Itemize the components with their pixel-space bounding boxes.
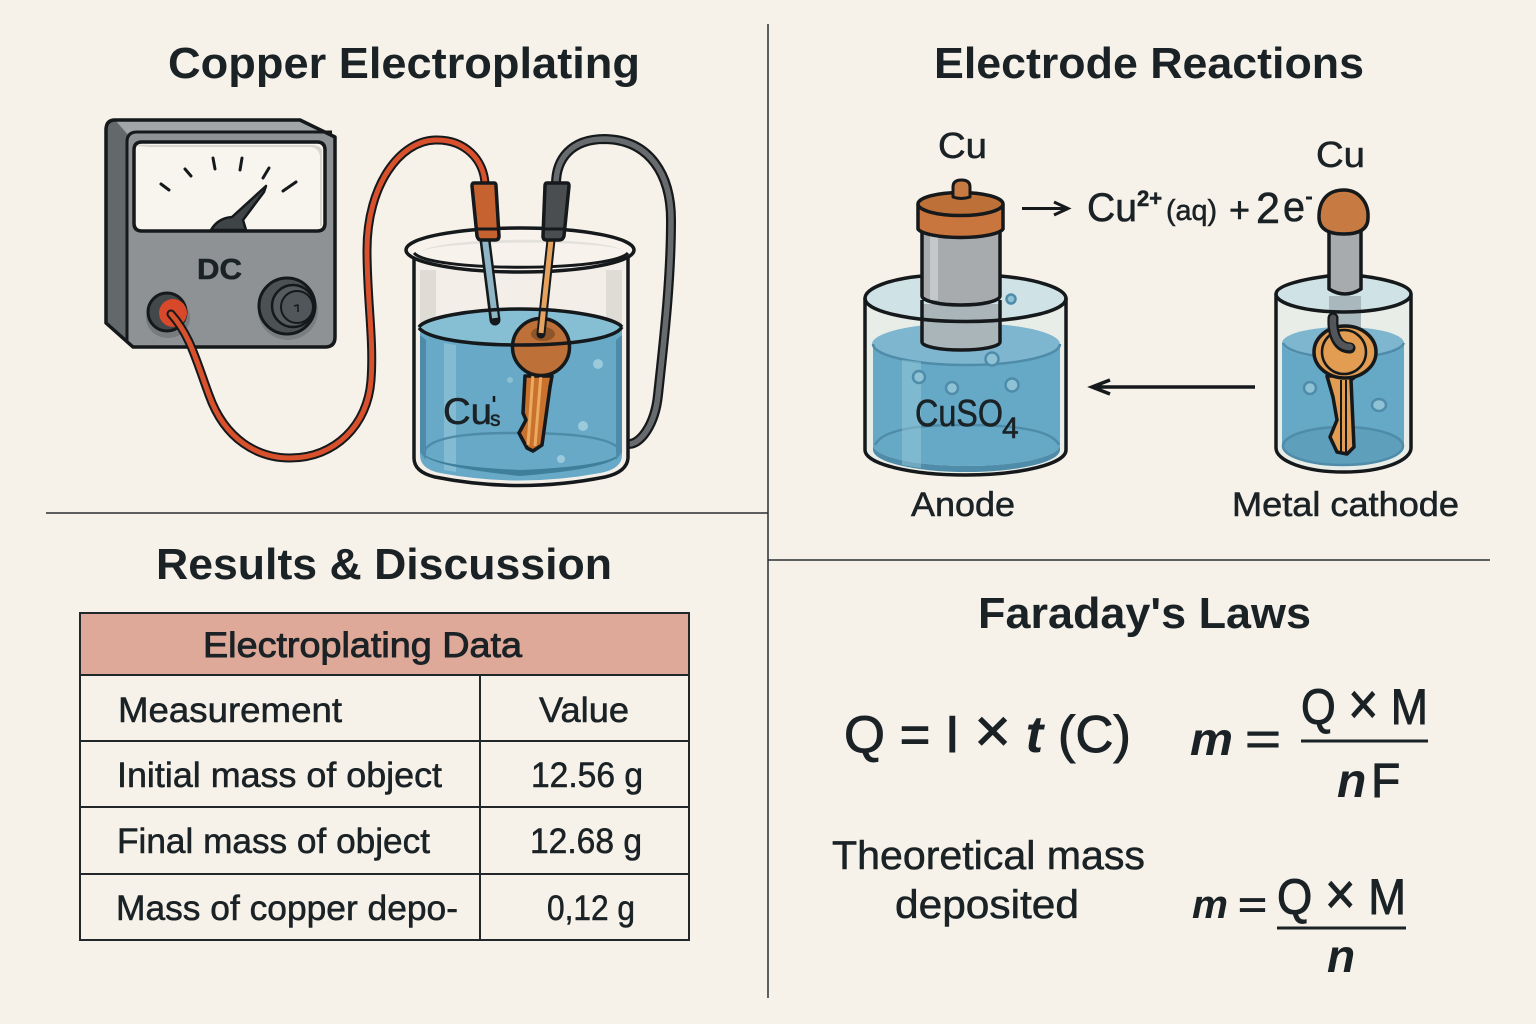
row: measurement: Measurement	[118, 691, 342, 730]
equation: anode oxidation: 2+	[1137, 186, 1162, 211]
label: Cu subscript s: Cu	[443, 391, 492, 432]
row: measurement: Value	[539, 691, 629, 730]
icon: cathode cell with key	[1276, 190, 1411, 472]
title: faraday's laws: Faraday's Laws	[978, 589, 1311, 638]
electrode: grey cylinder with copper cap	[918, 180, 1003, 350]
equation: anode oxidation: e	[1283, 183, 1305, 230]
panel: copper electroplating	[106, 39, 671, 486]
table header	[80, 613, 689, 675]
formula: mass: =	[1245, 713, 1281, 765]
probe: black clip	[541, 183, 569, 334]
label: theoretical mass deposited	[832, 834, 1145, 927]
formula: mass	[1190, 672, 1428, 808]
row: final mass	[117, 822, 642, 861]
row: measurement	[118, 691, 629, 730]
formula: mass: Q × M	[1301, 672, 1428, 737]
icon: beaker with copper sulfate solution	[406, 183, 634, 486]
equation: anode oxidation	[1087, 183, 1312, 233]
arrow: to left	[1092, 380, 1255, 394]
title: electrode reactions: Electrode Reactions	[934, 39, 1364, 88]
electrode: grey rod with copper ball	[1319, 190, 1368, 332]
formula: theoretical mass: Q × M	[1277, 862, 1406, 927]
icon: beaker with copper sulfate solution: s	[490, 408, 500, 431]
icon: DC power meter	[106, 120, 335, 347]
beaker rim	[406, 228, 634, 272]
title: results and discussion: Results & Discussion	[156, 540, 612, 589]
label: CuSO4: CuSO	[915, 393, 1003, 435]
equation: anode oxidation: +	[1229, 189, 1250, 230]
table: electroplating data: Electroplating Data	[203, 626, 523, 665]
formula: mass: F	[1371, 755, 1400, 808]
icon: anode cell: 4	[1002, 412, 1019, 445]
row: mass of copper deposited: Mass of copper depo-	[116, 889, 458, 928]
formula: theoretical mass	[1192, 862, 1406, 982]
formula: mass: m	[1190, 713, 1233, 765]
label: cathode Cu: Cu	[1316, 134, 1365, 175]
arrow: to right	[1022, 202, 1068, 215]
icon: copper key	[512, 318, 570, 451]
formula: theoretical mass: n	[1327, 930, 1355, 982]
equation: anode oxidation: (aq)	[1166, 195, 1217, 227]
equation: anode oxidation: 2	[1256, 184, 1280, 233]
formula: mass: n	[1337, 755, 1366, 808]
label: anode Cu: Cu	[938, 125, 987, 166]
label: theoretical mass deposited: deposited	[895, 883, 1079, 927]
panel: results and discussion	[80, 540, 689, 940]
label: DC: DC	[197, 254, 242, 286]
table: electroplating data	[80, 613, 689, 940]
formula: theoretical mass: =	[1238, 883, 1267, 927]
row: initial mass: 12.56 g	[531, 756, 643, 795]
row: initial mass	[117, 756, 643, 795]
formula: charge: Q = I × t (C)	[844, 697, 1131, 766]
probe: red clip	[472, 183, 499, 320]
label: anode: Anode	[911, 486, 1015, 524]
row: final mass: Final mass of object	[117, 822, 430, 861]
row: final mass: 12.68 g	[530, 822, 642, 861]
row: initial mass: Initial mass of object	[117, 756, 442, 795]
label: theoretical mass deposited: Theoretical mass	[832, 834, 1145, 878]
formula: theoretical mass: m	[1192, 883, 1228, 927]
wire: red lead	[171, 140, 485, 458]
title: copper electroplating: Copper Electroplating	[168, 39, 640, 88]
wire: black lead	[556, 139, 671, 444]
panel: faraday's laws	[832, 589, 1428, 982]
icon: anode cell	[865, 180, 1066, 475]
icon: brass key	[1314, 318, 1376, 454]
row: mass of copper deposited	[116, 889, 635, 928]
equation: anode oxidation: Cu	[1087, 186, 1137, 230]
panel: electrode reactions	[865, 39, 1459, 524]
row: mass of copper deposited: 0,12 g	[547, 889, 635, 928]
label: metal cathode: Metal cathode	[1232, 486, 1459, 524]
